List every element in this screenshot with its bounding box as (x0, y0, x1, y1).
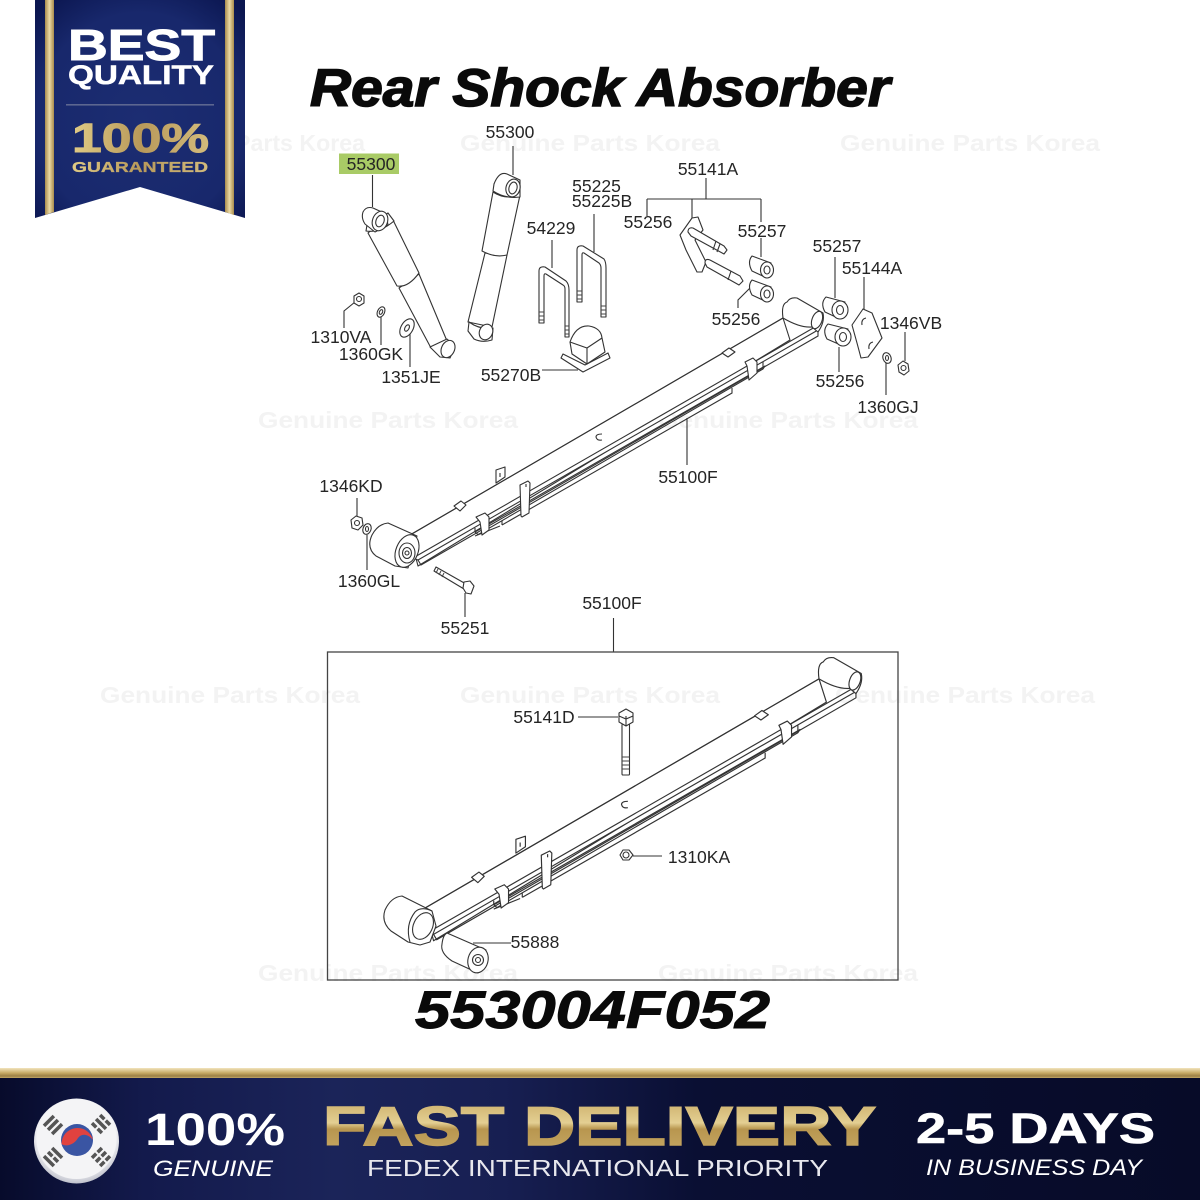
watermarks: Genuine Parts Korea (460, 682, 720, 708)
bump stop 55270B (561, 326, 610, 372)
u-bolt 55225 (577, 246, 606, 317)
tab small left (454, 501, 466, 511)
part number labels: 55270B (481, 365, 541, 385)
badge divider (66, 104, 214, 106)
part number labels: 55256 (816, 371, 864, 391)
washer 1360GJ (881, 351, 893, 365)
bushing 55256 upper (750, 280, 774, 302)
part number labels: 55256 (624, 212, 672, 232)
watermarks: Genuine Parts Korea (835, 682, 1095, 708)
part number labels: 55257 (813, 236, 861, 256)
part number labels: 1351JE (381, 367, 441, 387)
part number labels: 1346KD (319, 476, 383, 496)
badge: best quality ribbon (35, 0, 245, 218)
part number labels: 55300 (347, 154, 396, 174)
taeguk (61, 1124, 93, 1156)
nut 1310VA (354, 293, 364, 306)
watermarks: Parts Korea (235, 130, 365, 156)
clamp right (745, 358, 757, 380)
watermarks: Genuine Parts Korea (100, 682, 360, 708)
icon: korean flag button (34, 1098, 119, 1184)
badge text: 100%: 100% (72, 115, 209, 161)
text: FAST DELIVERY: FAST DELIVERY (323, 1095, 876, 1157)
gold band (0, 1068, 1200, 1078)
part number labels: 1310VA (311, 327, 372, 347)
washer 1351JE (397, 316, 417, 340)
spring body (410, 298, 825, 566)
part number labels: 55256 (712, 309, 760, 329)
text: 100%: 100% (145, 1104, 285, 1155)
watermarks: Genuine Parts Korea (840, 130, 1100, 156)
part number labels: 1360GK (339, 344, 403, 364)
part number labels: 54229 (527, 218, 575, 238)
leader lines (344, 146, 905, 943)
part number labels: 1310KA (668, 847, 730, 867)
text: IN BUSINESS DAY: IN BUSINESS DAY (926, 1155, 1144, 1180)
bushing 55257 right (823, 297, 848, 319)
washer 1360GL (361, 522, 373, 536)
part number labels: 55100F (658, 467, 718, 487)
nut 1310KA (620, 850, 633, 860)
text: FEDEX INTERNATIONAL PRIORITY: FEDEX INTERNATIONAL PRIORITY (367, 1155, 828, 1181)
part number labels: 55141A (678, 159, 738, 179)
exploded parts diagram (311, 122, 942, 980)
left open spring eye (384, 896, 438, 945)
part number labels: 55144A (842, 258, 902, 278)
nut 1346KD (351, 516, 363, 530)
watermarks: Genuine Parts Korea (658, 960, 918, 986)
part number labels: 1360GJ (857, 397, 919, 417)
band clip (520, 481, 530, 517)
part number labels: 55888 (511, 932, 559, 952)
bolt 55141D (619, 709, 633, 775)
bushing 55256 right (825, 324, 851, 346)
part number labels (311, 122, 942, 952)
badge text: BEST: BEST (68, 21, 215, 70)
leaf spring main (370, 298, 825, 571)
text: GENUINE: GENUINE (153, 1156, 274, 1181)
clamp left (476, 513, 489, 535)
watermarks: Genuine Parts Korea (658, 407, 918, 433)
bracket 55141A with pins (680, 217, 743, 285)
footer banner (0, 1068, 1200, 1200)
part number labels: 55225B (572, 191, 632, 211)
plate 55144A (852, 309, 882, 358)
watermarks: Genuine Parts Korea (258, 960, 518, 986)
nut 1346VB (898, 361, 909, 375)
part highlight: 55300 (339, 154, 399, 174)
center hole (596, 434, 602, 440)
watermarks: Genuine Parts Korea (258, 407, 518, 433)
hanger tab (496, 467, 505, 483)
left spring eye with bushing (370, 523, 424, 571)
part number labels: 55100F (582, 593, 642, 613)
badge text: GUARANTEED: GUARANTEED (72, 159, 208, 176)
part number labels: 1360GL (338, 571, 400, 591)
part number labels: 55141D (513, 707, 575, 727)
part number labels: 55300 (486, 122, 535, 142)
part number labels: 55251 (441, 618, 489, 638)
part number heading: 553004F052 (415, 981, 770, 1040)
badge text: QUALITY: QUALITY (68, 60, 214, 90)
trigrams (43, 1114, 111, 1167)
spring body detail (425, 658, 863, 941)
left shock absorber (362, 208, 458, 360)
u-bolt 54229 (539, 267, 569, 337)
bushing 55888 (442, 933, 491, 975)
bolt 55251 (434, 567, 474, 594)
right spring eye (782, 298, 823, 332)
washer 1360GK (376, 306, 386, 318)
bushing 55257 upper (750, 256, 774, 278)
watermarks (100, 130, 1100, 986)
part number labels: 55225 (572, 176, 621, 196)
part number labels: 55257 (738, 221, 786, 241)
part number labels: 1346VB (880, 313, 942, 333)
watermarks: Genuine Parts Korea (460, 130, 720, 156)
right shock absorber (468, 173, 522, 342)
leaf spring detail (384, 658, 863, 945)
navy background (0, 1078, 1200, 1200)
title: Rear Shock Absorber (310, 59, 894, 118)
tab small right (722, 348, 735, 357)
detail box (328, 652, 898, 980)
text: 2-5 DAYS: 2-5 DAYS (916, 1105, 1155, 1153)
